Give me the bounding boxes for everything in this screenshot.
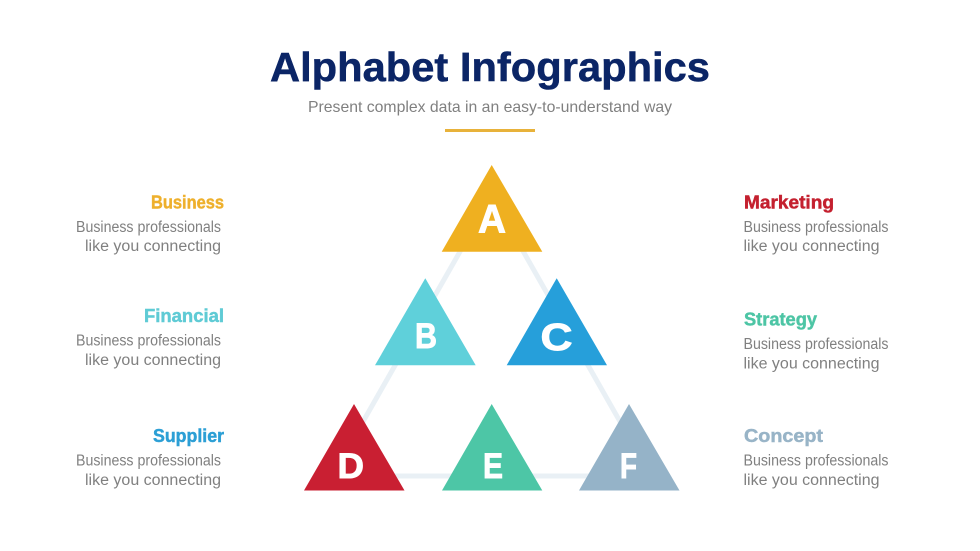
left block: Supplier: Supplier	[153, 426, 224, 446]
title: Alphabet Infographics	[270, 44, 710, 90]
left block: Supplier: Business professionals	[76, 452, 221, 470]
triangle C: C	[540, 317, 572, 359]
triangle F	[579, 404, 680, 490]
triangle C	[507, 278, 607, 365]
subtitle: Present complex data in an easy-to-understand way	[308, 99, 672, 116]
title accent bar	[445, 129, 535, 132]
right block: Strategy	[744, 310, 889, 372]
right block: Strategy: Strategy	[744, 310, 817, 330]
left block: Financial	[76, 306, 224, 369]
connecting triangle outline	[332, 196, 651, 476]
triangle A	[442, 165, 542, 252]
right block: Marketing: Marketing	[744, 192, 834, 212]
right block: Marketing	[744, 192, 889, 255]
right block: Strategy: Business professionals	[744, 336, 889, 353]
left block: Business: like you connecting	[85, 238, 221, 255]
triangle D	[304, 404, 404, 490]
triangle F: F	[620, 447, 637, 486]
left block: Financial: like you connecting	[85, 352, 221, 369]
left block: Business	[76, 192, 224, 255]
right block: Concept: like you connecting	[744, 472, 880, 489]
left block: Business: Business	[151, 192, 224, 212]
left block: Financial: Financial	[144, 306, 224, 326]
triangle E	[442, 404, 542, 490]
right block: Marketing: Business professionals	[744, 219, 889, 236]
right block: Strategy: like you connecting	[744, 356, 880, 372]
triangle D: D	[338, 447, 364, 486]
right block: Concept: Concept	[744, 426, 823, 446]
left block: Financial: Business professionals	[76, 332, 221, 350]
triangle E: E	[483, 447, 503, 486]
left block: Business: Business professionals	[76, 219, 221, 236]
right block: Marketing: like you connecting	[744, 238, 880, 255]
triangle B	[375, 278, 476, 365]
right block: Concept: Business professionals	[744, 452, 889, 470]
left block: Supplier: like you connecting	[85, 472, 221, 489]
triangle B: B	[415, 317, 437, 356]
right block: Concept	[744, 426, 889, 489]
triangle A: A	[478, 198, 506, 242]
left block: Supplier	[76, 426, 224, 489]
